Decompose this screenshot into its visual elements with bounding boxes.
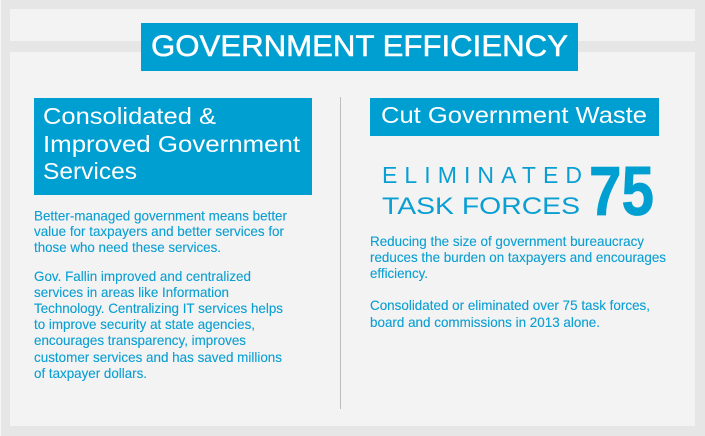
text block: reducing bureaucracy (370, 233, 666, 281)
text block: consolidated task forces (370, 297, 650, 330)
text block: consolidated task forces: board and commissions in 2013 alone. (370, 314, 600, 330)
title (141, 23, 578, 71)
text block: reducing bureaucracy: reduces the burden on taxpayers and encourages (370, 249, 666, 265)
text block: Gov. Fallin IT services: customer services and has saved millions (34, 349, 282, 365)
text block: Gov. Fallin IT services: services in areas like Information (34, 284, 229, 300)
stat: eliminated task forces 75: ELIMINATED (382, 162, 582, 188)
text block: Gov. Fallin IT services: of taxpayer dollars. (34, 365, 147, 381)
text block: Gov. Fallin IT services: Technology. Centralizing IT services helps (34, 300, 283, 316)
heading: consolidated and improved services: Services (43, 158, 137, 184)
stat: eliminated task forces 75: TASK FORCES (382, 193, 580, 220)
text block: Gov. Fallin IT services (34, 268, 283, 381)
text block: Gov. Fallin IT services: to improve security at state agencies, (34, 316, 255, 332)
stat: eliminated task forces 75 (382, 152, 654, 230)
heading: consolidated and improved services: Consolidated & (43, 103, 216, 129)
text block: reducing bureaucracy: efficiency. (370, 265, 428, 281)
panel: top band (10, 9, 695, 41)
text block: better-managed government (34, 208, 287, 255)
text block: better-managed government: value for taxpayers and better services for (34, 223, 284, 239)
heading: cut government waste (370, 98, 659, 136)
text block: reducing bureaucracy: Reducing the size of government bureaucracy (370, 233, 644, 249)
stat: eliminated task forces 75: 75 (589, 152, 654, 230)
heading: consolidated and improved services (34, 98, 312, 195)
text block: consolidated task forces: Consolidated or eliminated over 75 task forces, (370, 297, 650, 313)
text block: better-managed government: Better-managed government means better (34, 208, 287, 224)
heading: cut government waste: Cut Government Waste (381, 102, 647, 128)
text block: Gov. Fallin IT services: encourages transparency, improves (34, 332, 246, 348)
text block: Gov. Fallin IT services: Gov. Fallin improved and centralized (34, 268, 251, 284)
panel: consolidated services column (34, 98, 312, 381)
panel: cut waste column (370, 98, 666, 330)
title: GOVERNMENT EFFICIENCY (151, 30, 568, 63)
heading: consolidated and improved services: Improved Government (43, 131, 301, 157)
text block: better-managed government: those who need these services. (34, 239, 221, 255)
